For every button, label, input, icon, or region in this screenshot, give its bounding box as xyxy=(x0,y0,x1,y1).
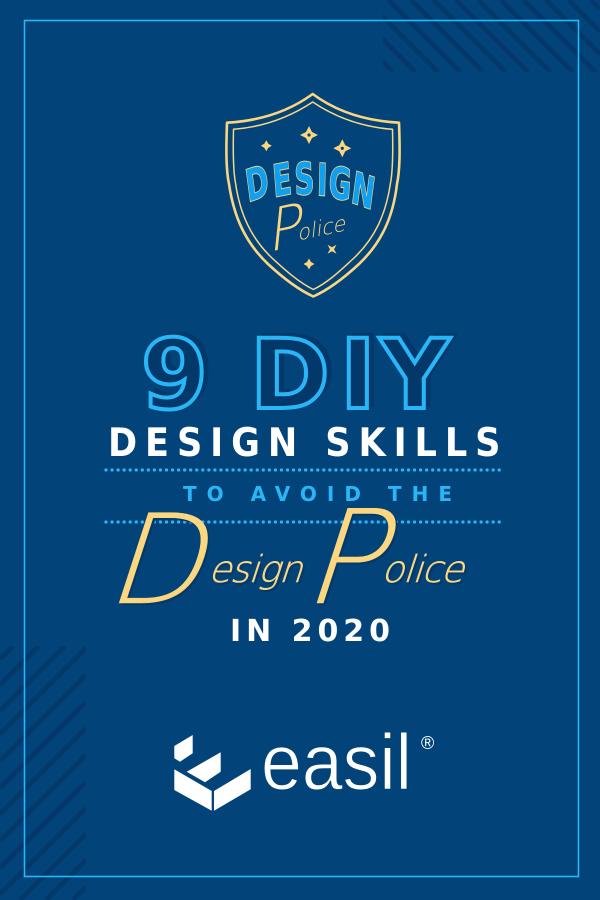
dotted divider top xyxy=(106,468,501,472)
logo wordmark: easil xyxy=(261,717,412,806)
stars xyxy=(261,126,351,270)
badge word: DESIGN: DESIGN xyxy=(243,153,378,220)
script shadow: D xyxy=(96,491,239,635)
stripes: bottom left xyxy=(0,646,86,900)
badge word: Police: olice xyxy=(297,211,348,247)
badge word: Police: P xyxy=(266,190,308,267)
stripes: top right xyxy=(383,0,600,72)
script shadow: P xyxy=(293,485,420,636)
registered mark: ® xyxy=(421,733,434,753)
logo mark xyxy=(174,735,251,811)
script shadow: esign xyxy=(207,550,314,593)
script text: esign xyxy=(205,548,312,591)
script text: D xyxy=(94,489,237,633)
title: 9 DIY xyxy=(141,316,456,431)
title outline: 9 DIY xyxy=(141,319,451,431)
script shadow: olice xyxy=(380,550,475,593)
heading: DESIGN SKILLS: DESIGN SKILLS xyxy=(108,420,500,465)
script text: olice xyxy=(378,548,473,591)
easil logo xyxy=(174,717,434,811)
subheading: TO AVOID THE: TO AVOID THE xyxy=(183,482,452,506)
title shadow: 9 DIY xyxy=(146,316,456,428)
script text: P xyxy=(291,483,418,634)
heading: IN 2020: IN 2020 xyxy=(230,614,390,649)
script heading: Design Police xyxy=(94,483,496,636)
shield badge xyxy=(226,94,400,296)
dotted divider bottom xyxy=(106,520,501,524)
shield outline xyxy=(226,94,400,296)
